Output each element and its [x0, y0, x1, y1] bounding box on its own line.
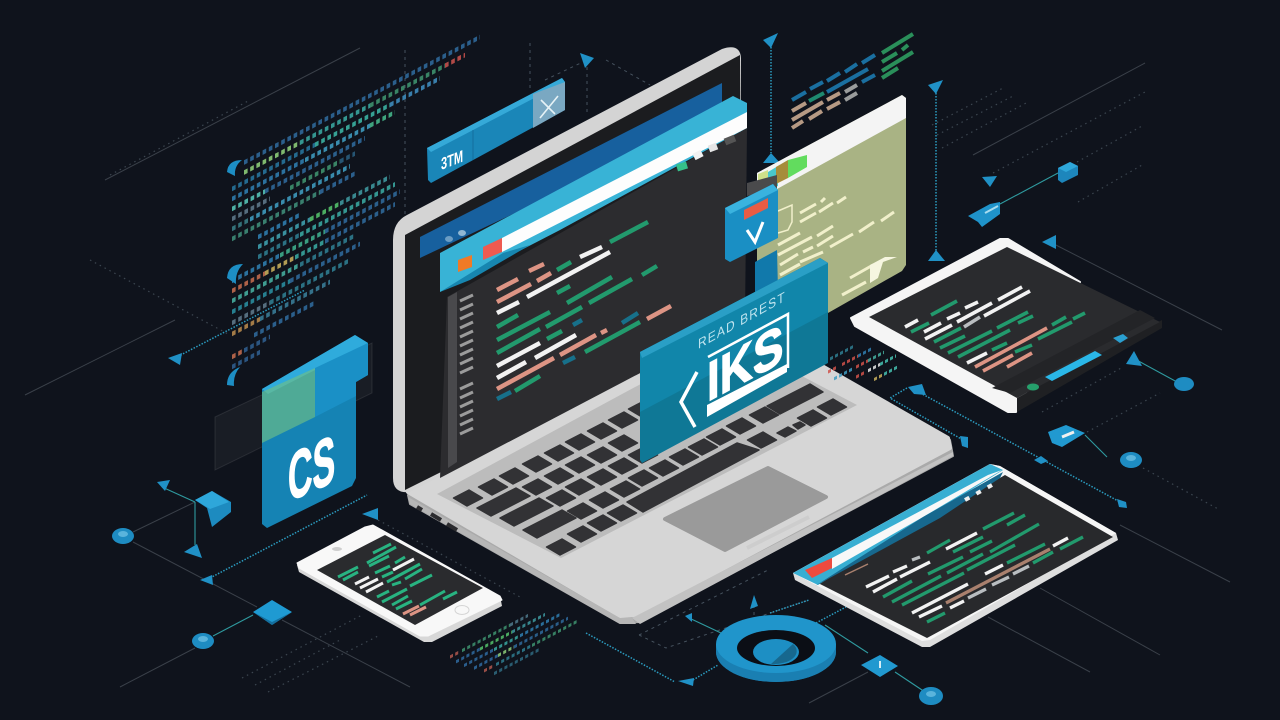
ring gauge	[716, 615, 836, 682]
phone code lines	[338, 544, 457, 615]
tablet code lines	[905, 287, 1085, 371]
node: bottom right block	[861, 655, 943, 705]
icon: check	[747, 222, 763, 242]
node: top right blocks	[968, 162, 1078, 227]
keyboard keys	[454, 384, 846, 555]
tag: check mark flag	[725, 175, 778, 300]
gutter ticks	[460, 295, 473, 434]
ports	[417, 507, 457, 530]
code block: bottom small	[450, 589, 578, 697]
node: right tag and circles	[1048, 377, 1194, 468]
chevron	[681, 372, 697, 427]
keyboard well	[437, 352, 857, 558]
badge label: 3TM	[441, 148, 463, 175]
card logo: IKS	[707, 313, 784, 414]
tablet: top right	[851, 239, 1162, 412]
icons: code block markers	[227, 160, 243, 386]
laptop base	[408, 322, 953, 624]
card heading: READ BREST	[698, 288, 786, 352]
tablet button	[1045, 351, 1102, 381]
CS label: CS	[288, 420, 335, 517]
badge: 3TM toolbar	[427, 78, 565, 183]
node: left bottom block	[192, 600, 292, 649]
front code window	[440, 96, 747, 478]
code lines	[497, 222, 671, 399]
code block: left floating code	[232, 37, 480, 367]
tablet: bottom right	[793, 464, 1118, 647]
trackpad	[665, 468, 826, 550]
small code text right of laptop	[828, 323, 898, 404]
translucent panel behind CS card	[215, 343, 372, 470]
tablet code lines	[845, 513, 1083, 622]
laptop lid	[393, 47, 747, 492]
arrowheads	[157, 33, 1142, 686]
card: CS file	[262, 335, 368, 528]
home button	[455, 606, 469, 614]
card: main logo panel	[640, 258, 828, 463]
node: left top block	[112, 491, 231, 544]
code snippet: top right	[792, 34, 913, 128]
back browser bar	[420, 83, 722, 258]
icon: up arrow	[870, 257, 897, 283]
window: olive browser panel	[757, 95, 906, 340]
phone	[297, 525, 502, 642]
